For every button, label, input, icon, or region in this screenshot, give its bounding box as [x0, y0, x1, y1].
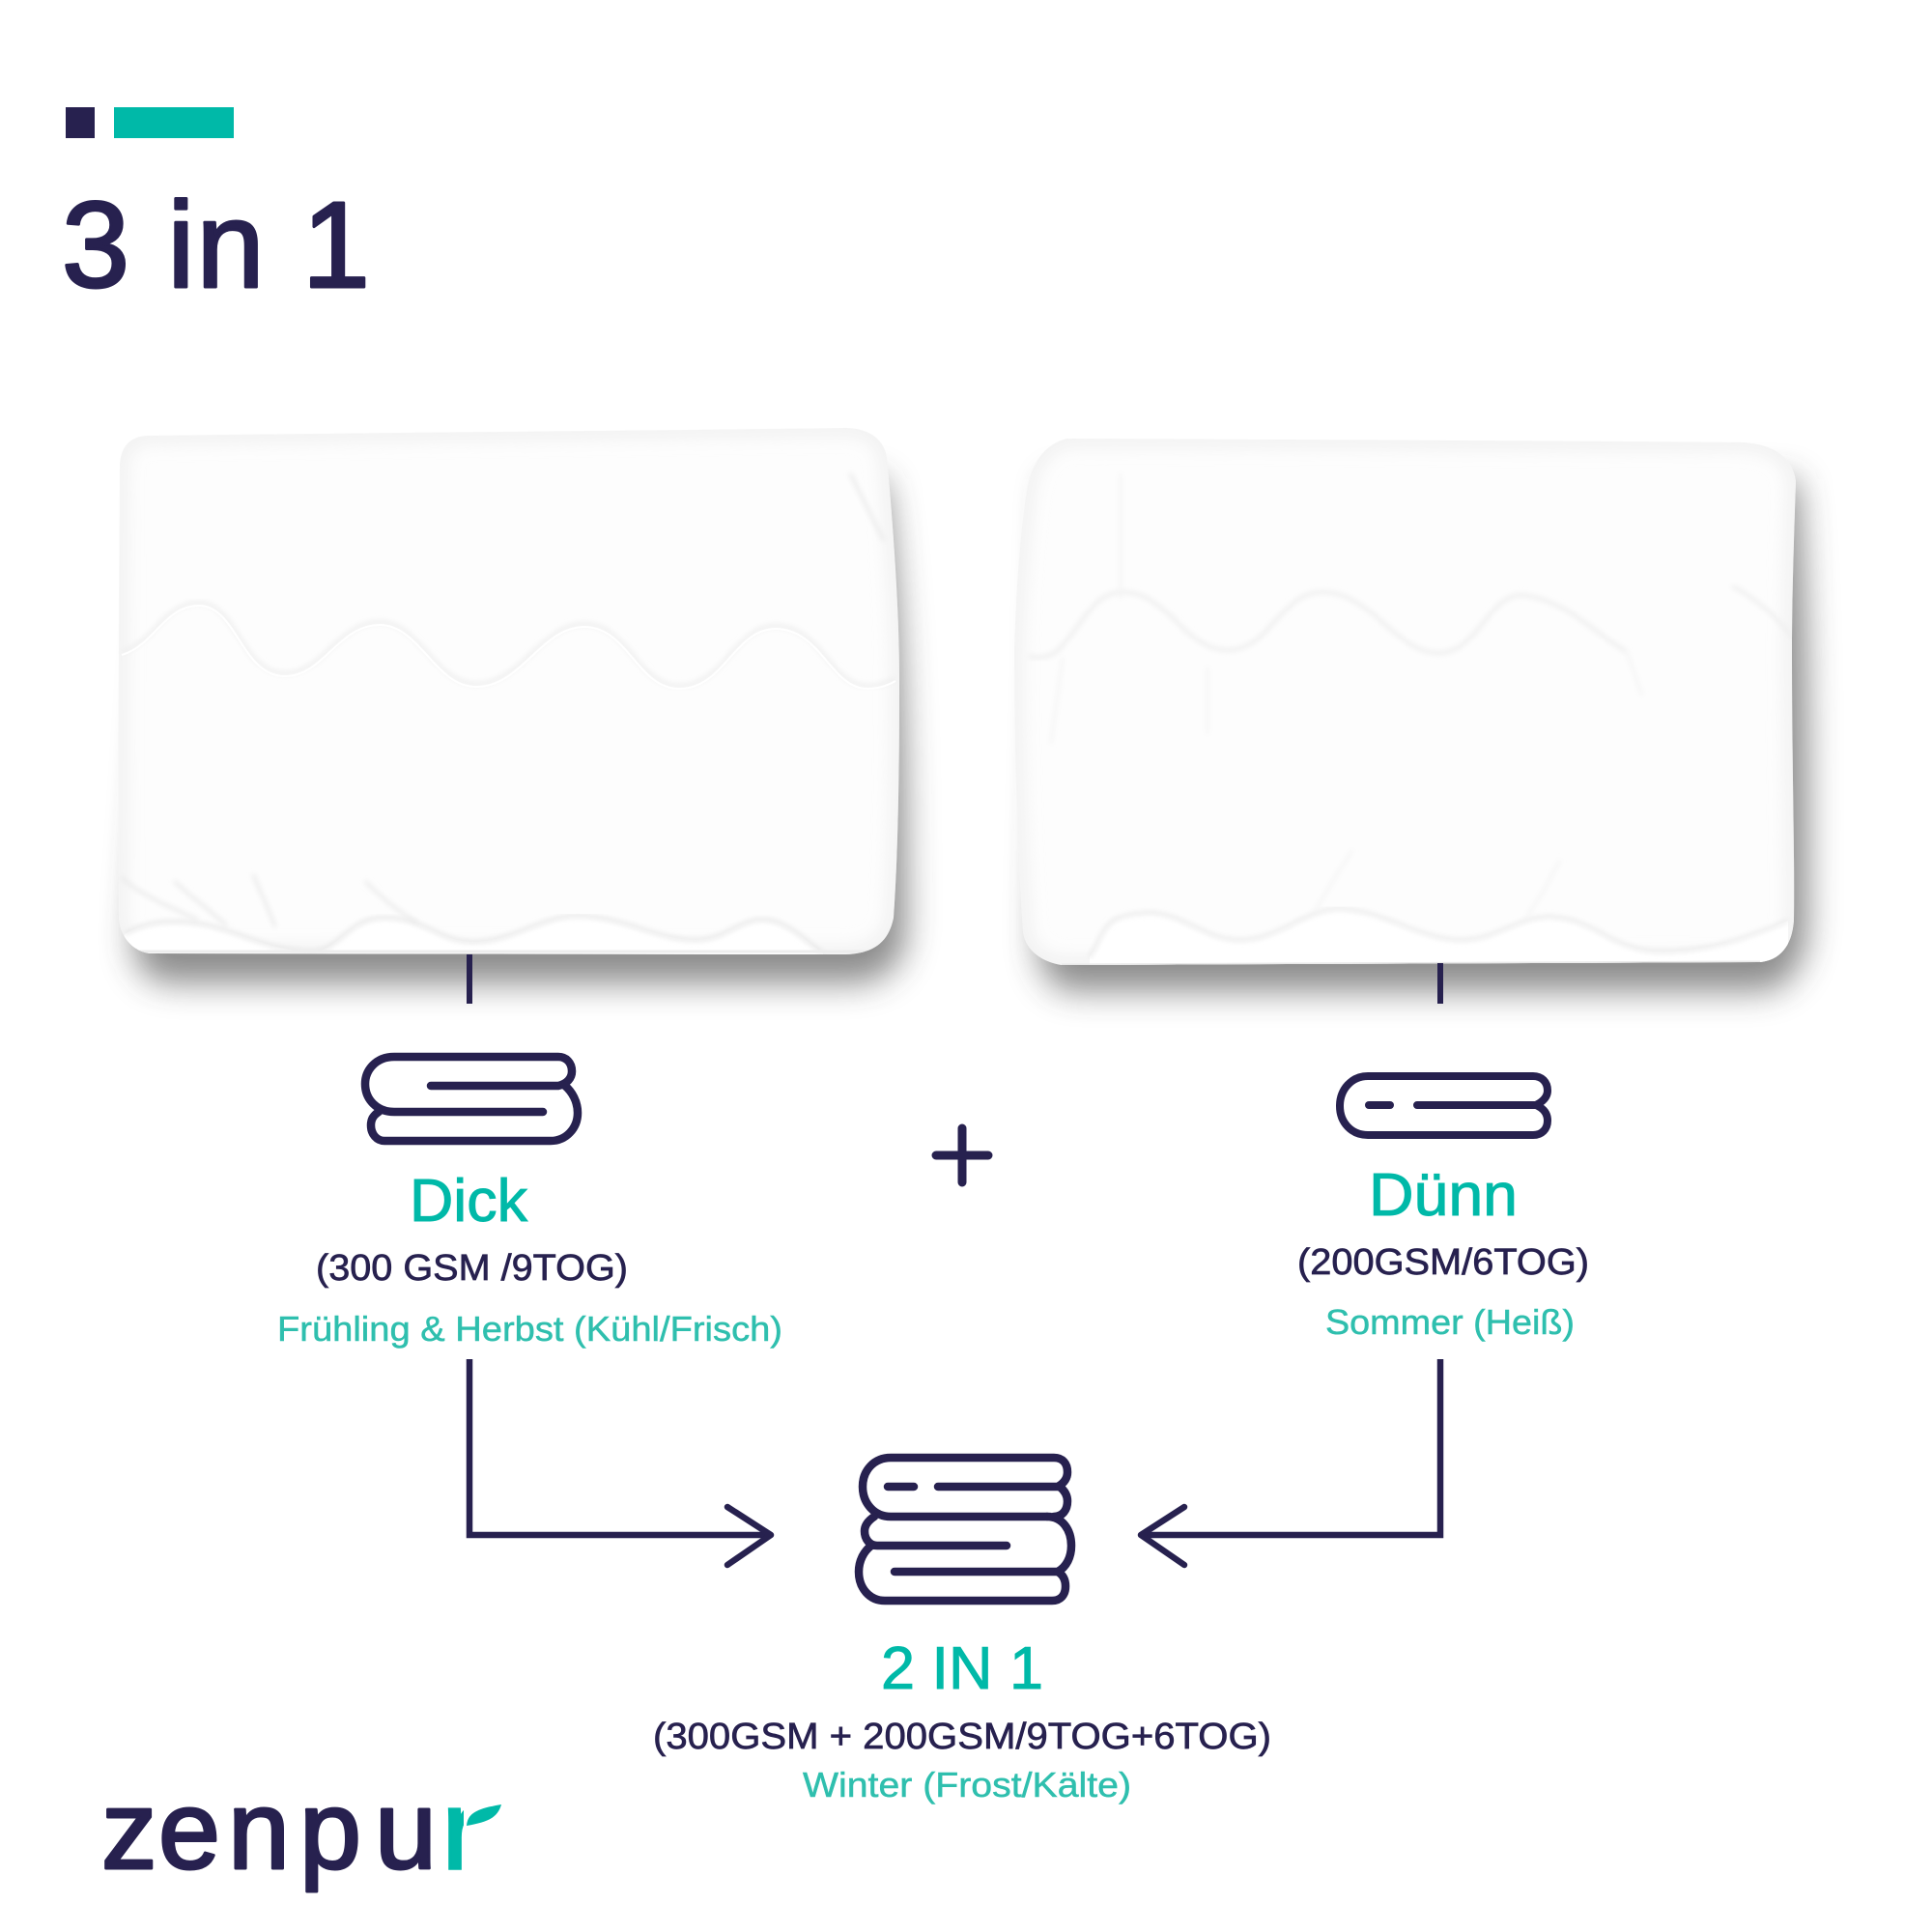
panel: thin duvet photo: [1005, 425, 1808, 991]
label: 2 IN 1: 2 IN 1: [881, 1635, 1043, 1702]
icon: thin folded blanket: [1340, 1076, 1548, 1135]
spec: thin duvet: (200GSM/6TOG): [1297, 1242, 1589, 1283]
logo: zenpur: zenpu: [101, 1769, 437, 1892]
spec: combined duvet: (300GSM + 200GSM/9TOG+6TOG): [653, 1717, 1271, 1757]
season: thin duvet: Sommer (Heiß): [1325, 1302, 1575, 1342]
season: thick duvet: Frühling & Herbst (Kühl/Frisch): [277, 1309, 782, 1349]
icon: thick folded blanket: [365, 1057, 578, 1141]
label: Dick: Dick: [410, 1168, 528, 1235]
logo: zenpur: [104, 1804, 501, 1893]
logo: zenpur: r: [442, 1769, 479, 1892]
panel: thick duvet photo: [106, 415, 908, 983]
arrow: thick duvet to 2 in 1: [469, 1359, 771, 1565]
season: combined duvet: Winter (Frost/Kälte): [803, 1765, 1131, 1804]
connector: thick duvet to icon: [467, 954, 472, 1004]
plus sign: [936, 1128, 988, 1182]
title: 3 in 1: [62, 177, 370, 313]
label: Dünn: Dünn: [1369, 1162, 1518, 1229]
spec: thick duvet: (300 GSM /9TOG): [316, 1248, 628, 1289]
icon: stacked blankets: [859, 1458, 1071, 1601]
connector: thin duvet to icon: [1437, 963, 1443, 1004]
header accent: navy square and teal bar: [66, 107, 234, 138]
arrow: thin duvet to 2 in 1: [1141, 1359, 1440, 1565]
